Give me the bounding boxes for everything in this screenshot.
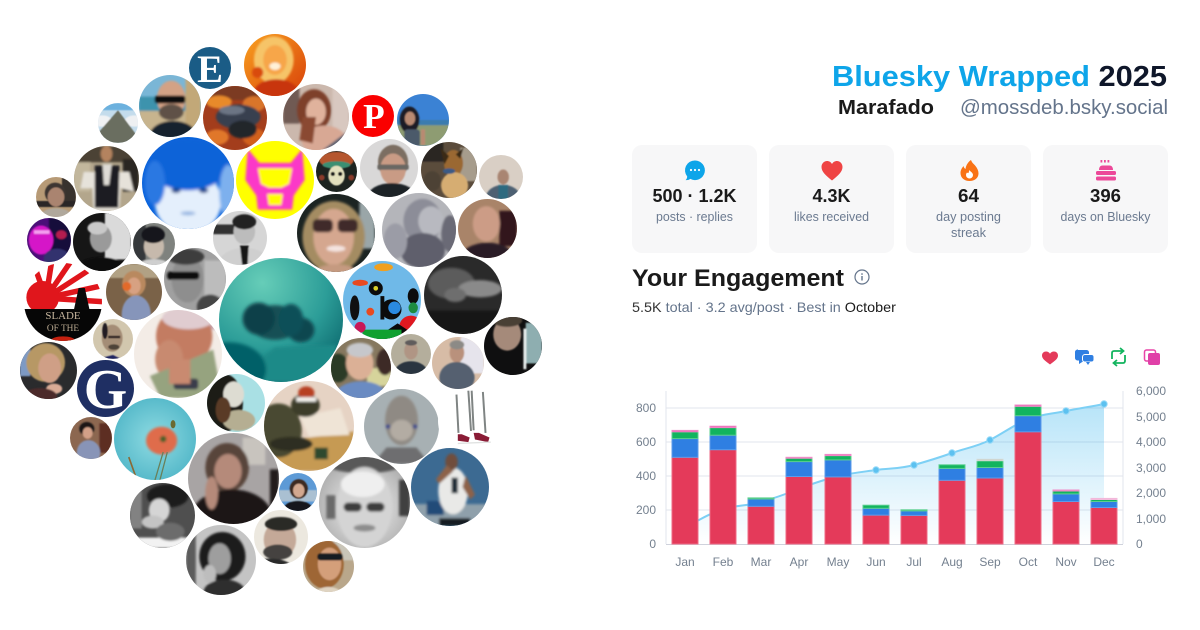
avatar: sugar skull — [316, 151, 357, 192]
bar: Jul — [901, 510, 927, 544]
right axis labels: 5,000 — [1136, 410, 1166, 424]
avatar: man in patterned vest — [479, 155, 523, 199]
bar: Nov — [1053, 490, 1079, 544]
stat value: 4.3K — [812, 186, 850, 206]
avatar: red rising sun poster with title — [24, 263, 102, 341]
cumulative area — [685, 404, 1104, 544]
icon: heart — [822, 161, 842, 180]
avatar: man close-up sepia — [93, 319, 133, 359]
right axis labels: 2,000 — [1136, 486, 1166, 500]
avatar: middle aged man portrait — [36, 177, 76, 217]
bar: Feb — [710, 426, 736, 544]
avatar: bw person eating — [130, 483, 195, 548]
stat label: posts · replies — [656, 210, 733, 224]
heading: Your Engagement: Your Engagement — [632, 265, 844, 292]
chart legend — [1042, 348, 1160, 366]
avatar: teal underwater silhouette — [219, 258, 343, 382]
month labels: Apr — [790, 555, 808, 569]
right axis labels: 1,000 — [1136, 512, 1166, 526]
icon: replies bubbles — [1075, 350, 1094, 365]
avatar: mountain — [98, 103, 138, 143]
handle: @mossdeb.bsky.social — [960, 97, 1168, 119]
right axis labels: 4,000 — [1136, 435, 1166, 449]
avatar: P logo: P — [363, 97, 385, 136]
avatar: E logo: E — [197, 49, 223, 91]
avatar cluster — [20, 34, 542, 605]
avatar: colourful Miro painting — [343, 261, 421, 339]
avatar: man with glasses — [360, 139, 418, 197]
stat value: 64 — [958, 186, 979, 206]
left axis labels: 200 — [636, 503, 656, 517]
panel: days on Bluesky — [1043, 145, 1168, 253]
avatar: man with lanyard — [391, 334, 431, 374]
avatar: woman with sunglasses in car — [297, 194, 375, 272]
left axis labels — [636, 401, 656, 551]
avatar: P logo — [352, 95, 394, 137]
avatar: small woman with sweater — [70, 417, 112, 459]
month labels: Sep — [979, 555, 1001, 569]
avatar: man with beard on pale background — [254, 510, 308, 564]
panel: day posting streak — [906, 145, 1031, 253]
left axis labels: 400 — [636, 469, 656, 483]
month labels: Jan — [675, 555, 695, 569]
month labels — [675, 555, 1115, 569]
panel: likes received — [769, 145, 894, 253]
icon: chat bubble — [685, 160, 705, 180]
icon: info — [855, 270, 869, 284]
avatar: man selfie in blue room — [411, 448, 489, 526]
cumulative line — [685, 401, 1107, 527]
month labels: Dec — [1093, 555, 1115, 569]
engagement summary: 5.5K total · 3.2 avg/post · Best in October — [632, 299, 896, 315]
bar: May — [825, 454, 851, 544]
avatar: woman with curly hair, hand on face — [188, 433, 279, 524]
avatar: grey sketch of bearded figure — [382, 193, 456, 267]
avatar: bw woman with curly hair — [186, 525, 256, 595]
month labels: Feb — [713, 555, 734, 569]
avatar: legs with red shoes — [438, 390, 491, 444]
month labels: Jun — [866, 555, 886, 569]
bar: Mar — [748, 498, 774, 544]
icon: reposts arrows — [1112, 348, 1125, 366]
month labels: May — [827, 555, 849, 569]
stat value: 396 — [1090, 186, 1121, 206]
title: Bluesky Wrapped 2025 — [832, 61, 1167, 93]
avatar: man with dark glasses bw — [164, 248, 226, 310]
avatar: man in vest — [74, 146, 139, 211]
avatar: red rising sun poster with title: OF THE — [47, 324, 79, 334]
bar: Oct — [1015, 405, 1041, 544]
stat value: 500 · 1.2K — [652, 186, 736, 206]
month labels: Jul — [906, 555, 922, 569]
avatar: man with blue shirt right — [484, 317, 542, 375]
avatar: bald man with sunglasses on beach — [139, 75, 201, 137]
avatar: red poppy on teal — [114, 398, 196, 480]
avatar: woman in sunglasses outdoors — [303, 541, 354, 592]
stat label: days on Bluesky — [1060, 210, 1151, 224]
bar: Sep — [977, 459, 1003, 544]
right axis labels: 6,000 — [1136, 384, 1166, 398]
avatar: bw man with headphones and glasses — [319, 457, 410, 548]
avatar: bald man smiling — [458, 199, 517, 258]
avatar: E logo — [189, 47, 231, 89]
avatar: yellow and pink pit bull — [236, 141, 314, 219]
bar: Jun — [863, 505, 889, 544]
month labels: Aug — [941, 555, 963, 569]
avatar: vintage portrait in suit — [213, 211, 267, 265]
right axis labels — [1136, 384, 1166, 551]
right axis labels: 3,000 — [1136, 461, 1166, 475]
panel: posts and replies — [632, 145, 757, 253]
left axis labels: 600 — [636, 435, 656, 449]
avatar: blonde woman — [20, 342, 77, 399]
left axis labels: 800 — [636, 401, 656, 415]
display name: Marafado — [838, 97, 934, 119]
avatar: man in grey t-shirt — [432, 337, 484, 389]
bar: Dec — [1091, 498, 1117, 544]
avatar: red haired woman — [283, 84, 349, 150]
avatar: silver mosaic head — [364, 389, 439, 464]
avatar: illustrated laughing woman — [244, 34, 306, 96]
avatar: black and white hands — [424, 256, 502, 334]
stat label: day posting — [936, 210, 1001, 224]
chart: monthly engagement — [636, 384, 1166, 569]
avatar: smiling older man — [331, 338, 391, 398]
avatar: woman under blue sky — [397, 94, 449, 146]
icon: cake — [1096, 160, 1116, 180]
right axis labels: 0 — [1136, 537, 1143, 551]
bar: Apr — [786, 457, 812, 544]
left axis labels: 0 — [649, 537, 656, 551]
avatar: cat with Santa hat — [264, 381, 354, 471]
avatar: blue toned child — [142, 137, 234, 229]
avatar: man resting face on hand — [134, 310, 222, 398]
avatar: purple neon selfie — [27, 218, 71, 262]
stat label: likes received — [794, 210, 869, 224]
avatar: small smiling woman at sea — [279, 473, 317, 511]
avatar: dark haired young man — [133, 223, 175, 265]
icon: flame — [960, 160, 978, 181]
avatar: red rising sun poster with title: SLADE — [45, 310, 81, 322]
avatar: black and white man — [73, 213, 131, 271]
month labels: Nov — [1055, 555, 1077, 569]
avatar: G logo: G — [84, 359, 127, 421]
icon: likes heart — [1042, 352, 1058, 364]
stat label — [936, 210, 1001, 240]
avatar: german shepherd — [421, 142, 477, 198]
stat label: streak — [951, 226, 987, 240]
avatar: profile of girl near bright window — [207, 374, 265, 432]
month labels: Oct — [1019, 555, 1038, 569]
bar: Jan — [672, 430, 698, 544]
icon: quotes squares — [1144, 350, 1160, 365]
bar: Aug — [939, 465, 965, 544]
month labels: Mar — [751, 555, 771, 569]
avatar: dragon book cover — [203, 86, 267, 150]
avatar: woman drinking — [106, 264, 162, 320]
